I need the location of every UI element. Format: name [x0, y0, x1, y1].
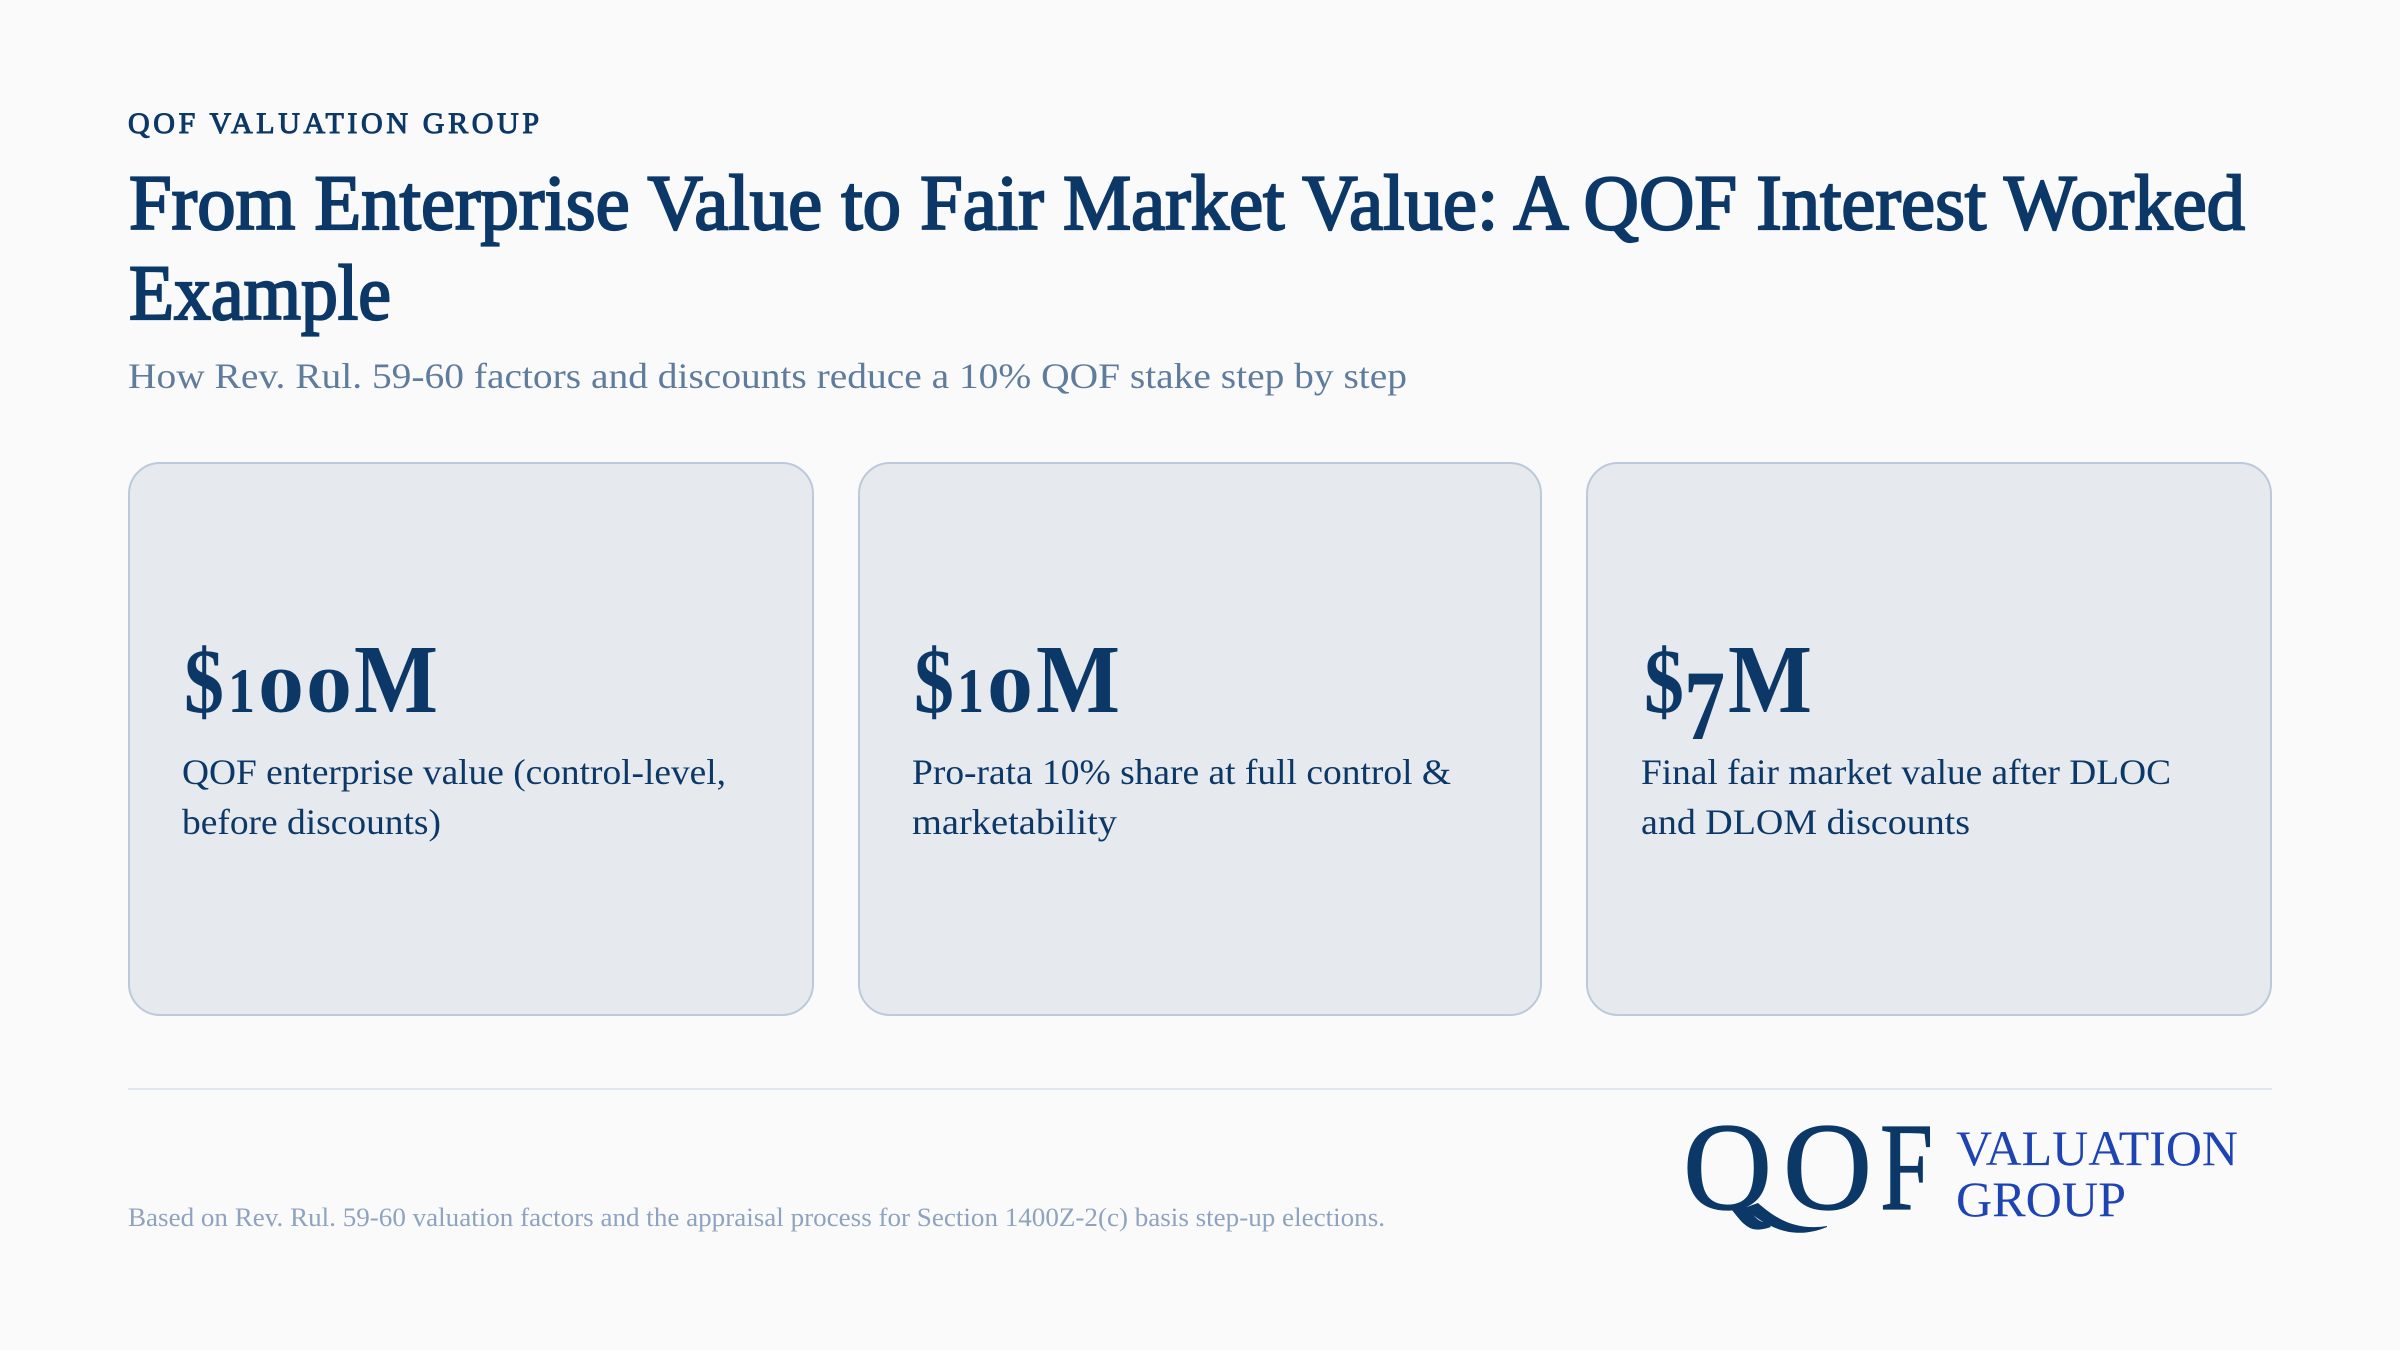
description: final fair market value: and DLOM discounts: [1641, 802, 1970, 842]
logo text: VALUATION GROUP: VALUATION: [1956, 1120, 2238, 1176]
description: enterprise value: before discounts): [182, 802, 441, 842]
logo wordmark: QOF: Q: [1683, 1099, 1772, 1237]
stat: $10M: $: [914, 630, 954, 732]
stat: $100M: 0: [306, 656, 352, 726]
stat: $100M: M: [354, 626, 438, 733]
panel: enterprise value: [129, 463, 813, 1015]
stat: $7M: 7: [1684, 650, 1725, 761]
logo wordmark: QOF: F: [1880, 1099, 1933, 1237]
description: pro-rata share: marketability: [912, 802, 1117, 842]
stat: $100M: 1: [228, 656, 255, 726]
stat: $100M: 0: [258, 656, 304, 726]
logo wordmark: QOF: O: [1783, 1099, 1872, 1237]
stat: $10M: M: [1036, 626, 1120, 733]
stat: $10M: 1: [957, 656, 984, 726]
description: final fair market value: Final fair market value after DLOC: [1641, 752, 2171, 792]
subtitle: How Rev. Rul. 59-60 factors and discounts reduce a 10% QOF stake step by step: [128, 356, 1407, 396]
panel: pro-rata share: [859, 463, 1541, 1015]
stat: $7M: $: [1644, 630, 1684, 732]
description: enterprise value: QOF enterprise value (control-level,: [182, 752, 726, 792]
stat: $10M: 0: [987, 656, 1033, 726]
logo Q tail: [1744, 1203, 1827, 1233]
logo: [1683, 1099, 2238, 1237]
logo text: VALUATION GROUP: GROUP: [1956, 1171, 2126, 1227]
description: pro-rata share: Pro-rata 10% share at full control &: [912, 752, 1451, 792]
panel: final fair market value: [1587, 463, 2271, 1015]
eyebrow: QOF VALUATION GROUP: [128, 107, 539, 140]
stat: $7M: M: [1728, 626, 1812, 733]
title: Example: [129, 249, 391, 336]
stat: $100M: $: [184, 630, 224, 732]
footnote: Based on Rev. Rul. 59-60 valuation factors and the appraisal process for Section 1400Z-2(c) basis step-up elections.: [128, 1203, 1385, 1232]
title: From Enterprise Value to Fair Market Value: A QOF Interest Worked: [129, 159, 2245, 246]
